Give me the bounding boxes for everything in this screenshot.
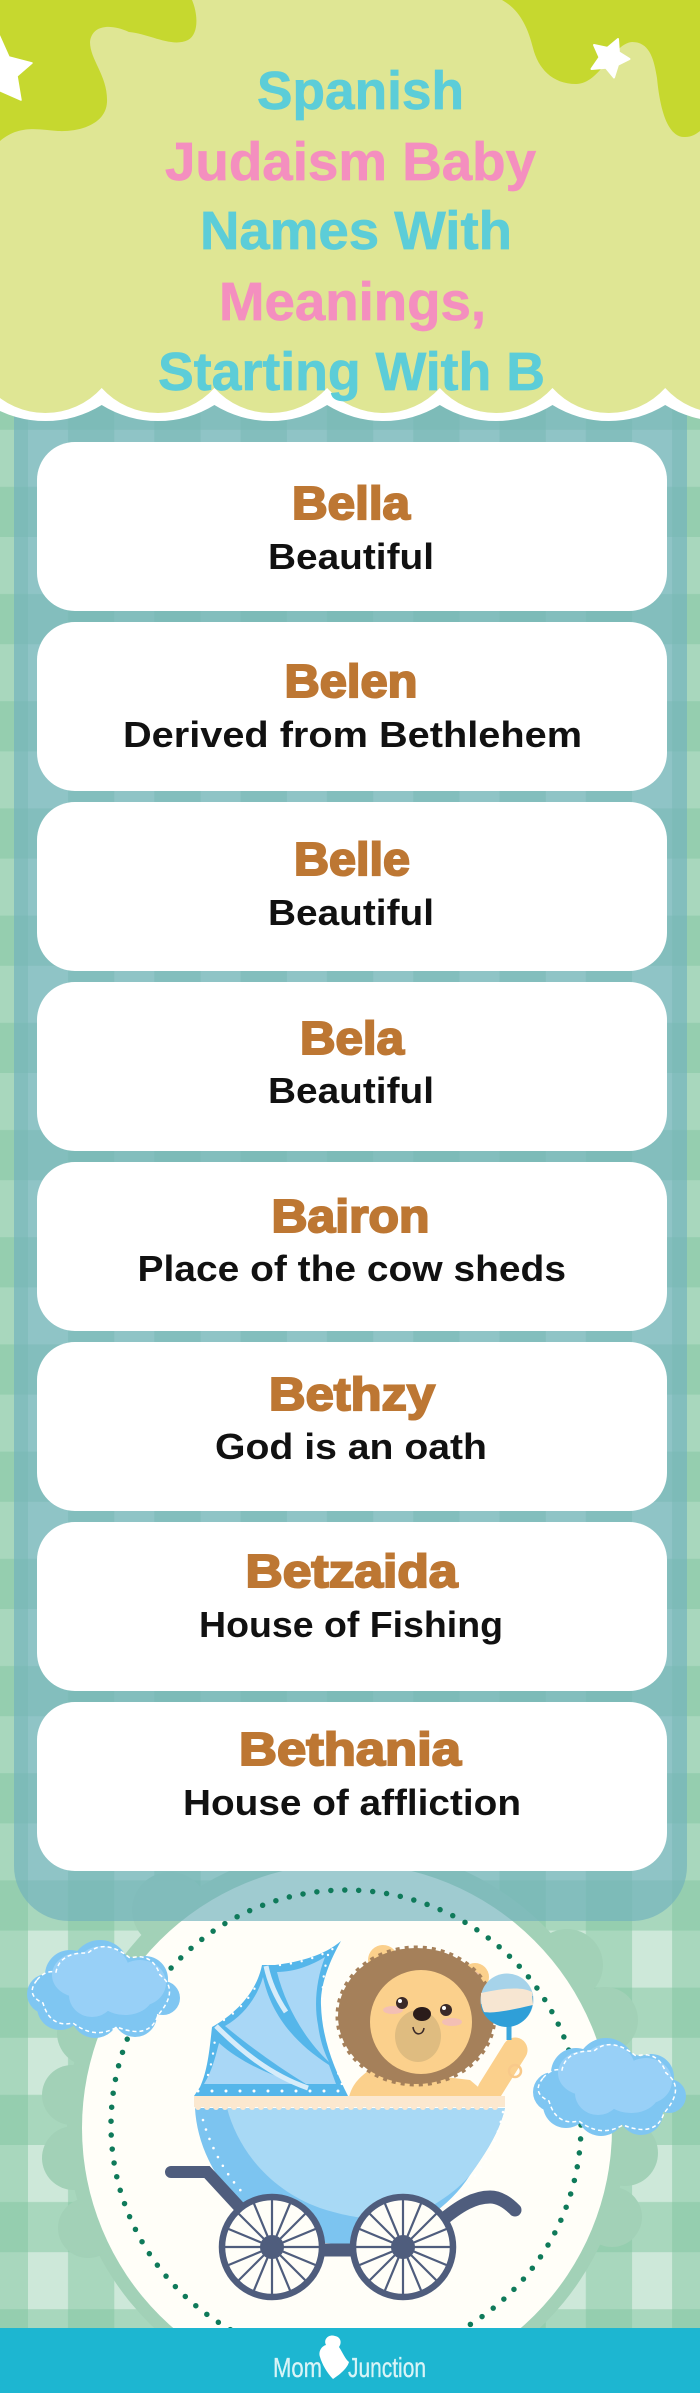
stroller handles [171,2172,515,2250]
icon: white star right [592,39,630,78]
card: Belen: Belen [284,655,418,707]
card: Bethzy: God is an oath [215,1426,487,1467]
header pale green fill [0,0,700,413]
illustration: lion in stroller [171,1941,534,2297]
left cloud [27,1940,180,2038]
card: Betzaida: Betzaida [246,1545,458,1597]
card: Bela: Beautiful [268,1070,434,1111]
card: Bethzy: Bethzy [269,1368,435,1420]
stroller basket [194,2096,505,2244]
cream circle [82,1863,612,2393]
lion body and arm [349,2050,521,2097]
header: scalloped title area [0,0,700,421]
icon: mother and heart [319,2336,349,2379]
left wheel [222,2197,322,2297]
lion mane [338,1948,494,2084]
card: Belle: Beautiful [268,892,434,933]
title: Meanings, [219,272,486,332]
baby rattle [480,1974,534,2040]
lion ears [368,1945,489,1991]
lime blob top-left [0,0,196,141]
right cloud [533,2038,686,2136]
logo: MomJunction [273,2336,426,2383]
card: Bella [37,442,667,611]
card: Betzaida: House of Fishing [199,1604,503,1645]
card: Bela [37,982,667,1151]
card: Bairon [37,1162,667,1331]
card: Bella: Bella [292,477,410,529]
logo: MomJunction: Mom [273,2352,322,2383]
card: Belle: Belle [294,833,410,885]
title [158,61,545,402]
card: Bairon: Bairon [272,1190,430,1242]
right wheel [353,2197,453,2297]
footer banner [0,2328,700,2393]
card: Belen: Derived from Bethlehem [123,714,582,755]
lime blob top-right [502,0,700,137]
title: Starting With B [158,342,545,402]
card: Bela: Bela [300,1012,404,1064]
title: Names With [200,201,512,261]
stroller canopy [194,1941,348,2096]
card: Belen [37,622,667,791]
card: Betzaida [37,1522,667,1691]
card: Bethania: House of affliction [183,1782,521,1823]
card: Bethania: Bethania [239,1723,461,1775]
logo: MomJunction: Junction [348,2352,426,2383]
panel: translucent teal list backing [14,300,687,1921]
scalloped green blob behind circle [42,1845,658,2393]
dotted ring [111,1890,581,2360]
card: Bairon: Place of the cow sheds [138,1248,566,1289]
title: Judaism Baby [165,132,536,192]
header white scalloped rim [0,0,700,421]
card: Bethzy [37,1342,667,1511]
icon: white star left [0,28,32,100]
lion face [370,1970,472,2074]
card: Bethania [37,1702,667,1871]
card: Belle [37,802,667,971]
card: Bella: Beautiful [268,536,434,577]
title: Spanish [257,61,464,121]
